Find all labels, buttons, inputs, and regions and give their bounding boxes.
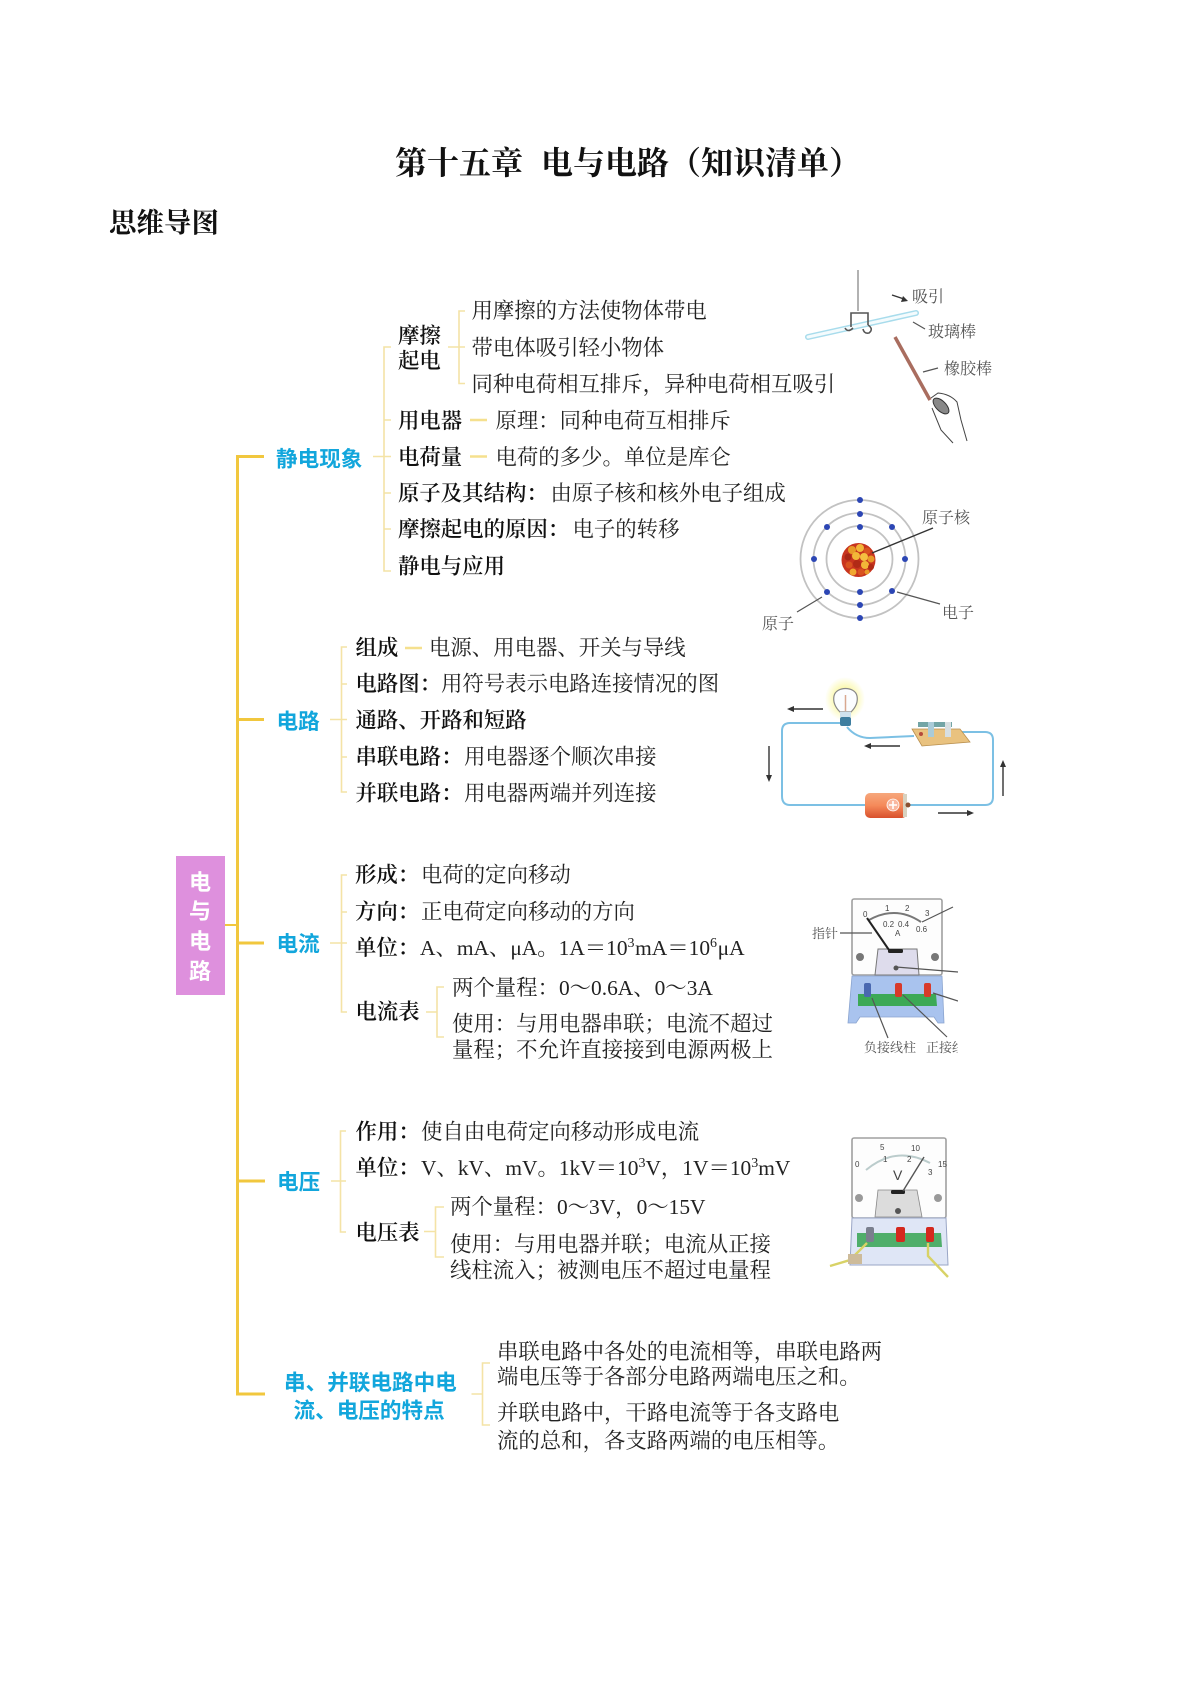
- friction item 3: 同种电荷相互排斥，异种电荷相互吸引: [472, 372, 835, 398]
- atom row: 由原子核和核外电子组成: [550, 482, 786, 506]
- labels: 负接线柱: [864, 1040, 916, 1055]
- illustration: voltmeter: [830, 1138, 948, 1277]
- series characteristics: 串联电路中各处的电流相等，串联电路两: [497, 1340, 882, 1365]
- title: 第十五章: [395, 145, 523, 181]
- scale numbers: 15: [938, 1160, 947, 1169]
- scale numbers: V: [893, 1167, 903, 1183]
- cause row: 电子的转移: [572, 518, 679, 542]
- wires: [830, 1243, 948, 1277]
- formation row: 形成：: [355, 863, 419, 887]
- direction row: 正电荷定向移动的方向: [421, 900, 635, 924]
- labels: 指针: [812, 926, 838, 941]
- battery: [865, 793, 910, 818]
- current arrows: [766, 706, 1006, 816]
- unit row: 3: [638, 1156, 645, 1171]
- scale numbers: 10: [911, 1144, 920, 1153]
- branch connectors: [373, 311, 465, 571]
- bulb: [834, 688, 857, 726]
- labels: [762, 509, 974, 633]
- root node: 电: [189, 929, 211, 954]
- charge row: 电荷的多少。单位是库仑: [496, 446, 731, 470]
- electrons: [811, 497, 908, 621]
- labels: 电子: [942, 604, 974, 622]
- branch label: 静电现象: [276, 446, 362, 472]
- panel: voltage branch: [277, 1120, 791, 1282]
- illustration: charged rods: [808, 270, 992, 443]
- parallel row: 并联电路：: [356, 782, 462, 806]
- scale numbers: 2: [907, 1155, 912, 1164]
- illustration: ammeter: [812, 898, 958, 1054]
- labels: [892, 288, 992, 378]
- scale numbers: 0.2: [883, 920, 895, 929]
- friction item 2: 带电体吸引轻小物体: [472, 336, 664, 360]
- root node: 路: [189, 959, 211, 984]
- electroscope row: 原理：同种电荷互相排斥: [496, 409, 731, 433]
- scale numbers: 1: [883, 1155, 888, 1164]
- labels: 橡胶棒: [944, 360, 992, 378]
- diagram row: 用符号表示电路连接情况的图: [441, 672, 719, 696]
- scale numbers: 1: [885, 904, 890, 913]
- parallel characteristics: 并联电路中，干路电流等于各支路电: [497, 1401, 839, 1426]
- scale numbers: [863, 904, 930, 938]
- voltmeter usage: 使用：与用电器并联；电流从正接: [450, 1232, 771, 1256]
- formation row: 电荷的定向移动: [421, 863, 571, 887]
- branch label: 串、并联电路中电: [284, 1370, 457, 1395]
- scale numbers: A: [895, 929, 901, 938]
- unit row: 单位：: [356, 1156, 420, 1180]
- series row: 串联电路：: [356, 745, 462, 769]
- root node: 与: [189, 899, 211, 924]
- application row: 静电与应用: [398, 554, 505, 578]
- parallel row: 用电器两端并列连接: [464, 782, 657, 806]
- illustration: atom: [762, 497, 974, 633]
- scale numbers: 5: [880, 1143, 885, 1152]
- electroscope row: 用电器: [398, 409, 462, 433]
- function row: 使自由电荷定向移动形成电流: [421, 1120, 699, 1144]
- scale numbers: 0.6: [916, 925, 928, 934]
- unit row: mV: [758, 1156, 791, 1180]
- voltmeter range: 两个量程：0～3V，0～15V: [450, 1195, 706, 1220]
- title: 电与电路（知识清单）: [541, 145, 861, 181]
- parallel characteristics: 流的总和，各支路两端的电压相等。: [497, 1429, 839, 1454]
- unit row: μA: [718, 936, 745, 960]
- panel: current branch: [276, 863, 773, 1062]
- branch connectors: [330, 647, 347, 792]
- ammeter usage: 量程；不允许直接接到电源两极上: [452, 1038, 773, 1062]
- labels: [812, 926, 958, 1054]
- friction electrification label: 起电: [398, 349, 441, 373]
- series row: 用电器逐个顺次串接: [464, 745, 657, 769]
- section heading: 思维导图: [109, 207, 219, 238]
- panel: static electricity branch: [276, 299, 835, 578]
- scale numbers: 3: [928, 1168, 933, 1177]
- diagram row: 电路图：: [356, 672, 441, 696]
- labels: 吸引: [912, 288, 944, 306]
- illustration: simple circuit: [766, 677, 1006, 818]
- scale numbers: 3: [925, 909, 930, 918]
- voltmeter usage: 线柱流入；被测电压不超过电量程: [450, 1258, 771, 1282]
- root node: [176, 856, 225, 995]
- friction item 1: 用摩擦的方法使物体带电: [472, 299, 707, 323]
- branch connectors: [331, 1131, 444, 1257]
- direction row: 方向：: [355, 900, 419, 924]
- labels: 原子核: [922, 509, 971, 527]
- scale numbers: 0: [855, 1160, 860, 1169]
- friction electrification label: 摩擦: [398, 324, 441, 348]
- scale numbers: [855, 1143, 947, 1183]
- unit row: 3: [628, 936, 635, 951]
- ammeter usage: 使用：与用电器串联；电流不超过: [452, 1012, 773, 1036]
- branch label: 电流: [276, 932, 320, 956]
- ammeter label: 电流表: [356, 1000, 420, 1024]
- branch connectors: [330, 875, 444, 1037]
- labels: 正接线柱: [926, 1040, 978, 1055]
- root node: 电: [189, 870, 211, 895]
- unit row: 3: [751, 1156, 758, 1171]
- branch label: 电路: [276, 709, 320, 734]
- composition row: 电源、用电器、开关与导线: [429, 636, 686, 660]
- switch: [912, 722, 970, 746]
- main trunk connector: [225, 456, 265, 1394]
- function row: 作用：: [356, 1120, 420, 1144]
- voltmeter label: 电压表: [356, 1221, 420, 1245]
- branch label: 流、电压的特点: [294, 1398, 445, 1423]
- ammeter range: 两个量程：0～0.6A、0～3A: [452, 976, 713, 1000]
- cause row: 摩擦起电的原因：: [398, 518, 569, 542]
- series characteristics: 端电压等于各部分电路两端电压之和。: [497, 1365, 861, 1389]
- composition dash: [405, 647, 422, 649]
- scale numbers: 0: [863, 910, 868, 919]
- electroscope dash: [470, 419, 487, 421]
- charge row: 电荷量: [398, 446, 462, 470]
- panel: circuit branch: [276, 636, 719, 806]
- labels: 玻璃棒: [928, 323, 976, 341]
- unit row: V，1V＝10: [645, 1156, 751, 1181]
- atom row: 原子及其结构：: [398, 482, 548, 506]
- scale numbers: 0.4: [898, 920, 910, 929]
- panel: series and parallel characteristics: [284, 1340, 882, 1454]
- scale numbers: 2: [905, 904, 910, 913]
- charge dash: [470, 455, 487, 458]
- branch label: 电压: [277, 1170, 320, 1194]
- unit row: V、kV、mV。1kV＝10: [421, 1156, 638, 1180]
- unit row: mA＝10: [635, 936, 710, 960]
- labels: 原子: [762, 615, 794, 633]
- unit row: 单位：: [355, 936, 419, 960]
- composition row: 组成: [356, 636, 398, 660]
- branch connectors: [472, 1363, 490, 1425]
- unit row: A、mA、μA。1A＝10: [420, 936, 628, 960]
- unit row: 6: [710, 936, 717, 951]
- states row: 通路、开路和短路: [356, 708, 527, 732]
- nucleus: [842, 543, 876, 577]
